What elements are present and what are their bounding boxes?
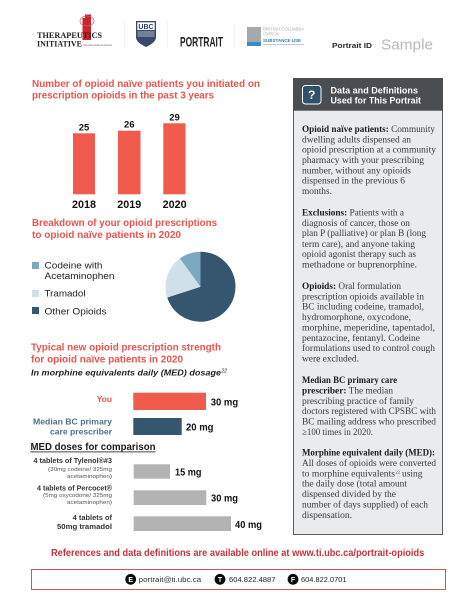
- bar: you: [97, 393, 238, 410]
- pie legend: Acetaminophen: [44, 271, 114, 281]
- definition: exclusions: plan P (palliative) or plan B (long: [302, 228, 426, 239]
- pie legend: Tramadol: [44, 288, 86, 298]
- contact box: 604.822.4887: [229, 577, 276, 584]
- definition: morphine equivalent daily: [302, 448, 436, 521]
- definition: opioids: BC including codeine, tramadol,: [302, 303, 424, 313]
- definition: opioid naive patients: months.: [302, 187, 332, 197]
- definition: morphine equivalent daily: 22: [396, 469, 400, 474]
- definition: median prescriber: ≥100 times in 2020.: [302, 428, 373, 438]
- bar: tramadol: 50mg tramadol: [57, 524, 112, 531]
- panel header: Data and Definitions: [330, 86, 418, 96]
- definition: exclusions: diagnosis of cancer, those on: [302, 218, 410, 229]
- logo: UBC shield: UBC: [138, 24, 154, 31]
- definition: morphine equivalent daily: to morphine equivalents: [302, 469, 395, 479]
- portrait id: Sample: [381, 36, 433, 54]
- pie legend: [32, 260, 114, 316]
- bar: Percocet: 30 mg: [211, 492, 238, 504]
- bar: Tylenol: 15 mg: [175, 466, 202, 478]
- icon: fax: [288, 574, 298, 585]
- bar: median prescriber: care prescriber: [50, 426, 113, 436]
- definition: opioids: formulations used to control cough: [302, 343, 435, 354]
- panel header: ?: [308, 88, 315, 102]
- definition: opioid naive patients: dwelling adults dispensed an: [302, 135, 411, 145]
- bar: you: 30 mg: [211, 396, 238, 408]
- logo: Therapeutics Initiative: THERAPEUTICS: [37, 31, 103, 40]
- definition: morphine equivalent daily: Morphine equivalent daily (MED):: [302, 448, 435, 458]
- definition: morphine equivalent daily: the daily dose (total amount: [302, 479, 407, 490]
- definition: opioid naive patients: opioid prescription at a community: [302, 146, 436, 156]
- bar: you: You: [97, 394, 112, 404]
- definition: morphine equivalent daily: using: [402, 469, 423, 479]
- contact box: portrait@ti.ubc.ca: [139, 577, 201, 584]
- logo: Therapeutics Initiative: [37, 14, 112, 48]
- icon: fax: F: [291, 577, 296, 584]
- icon: telephone: T: [218, 577, 223, 584]
- icon: email: E: [128, 577, 133, 584]
- heading: patients initiated: [32, 79, 260, 102]
- heading: prescription strength: [31, 342, 227, 378]
- bar chart: patients per year: 26: [124, 120, 135, 130]
- bar: tramadol: 4 tablets of: [73, 515, 113, 522]
- bar: Tylenol: (30mg codeine/ 325mg: [48, 467, 112, 473]
- bar: tramadol: [57, 515, 262, 531]
- heading: breakdown: [32, 218, 217, 241]
- definition: exclusions: term care), and anyone taking: [302, 239, 415, 250]
- logo: UBC shield: [136, 21, 156, 47]
- references line: References and data definitions are available online at www.ti.ubc.ca/portrait-opioids: [51, 548, 425, 559]
- definition: opioid naive patients: [302, 125, 436, 197]
- icon: email: [125, 574, 136, 585]
- definition: median prescriber: prescribing practice of family: [302, 396, 414, 407]
- heading: patients initiated: Number of opioid naïve patients you initiated on: [32, 79, 260, 90]
- pie legend: Other Opioids: [44, 306, 107, 316]
- definition: opioids: morphine, meperidine, tapentadol,: [302, 323, 435, 333]
- bar chart: patients per year: 29: [169, 112, 180, 124]
- definition: morphine equivalent daily: All doses of opioids were converted: [302, 458, 436, 469]
- bar chart: patients per year: 25: [79, 122, 90, 133]
- bar: median prescriber: [33, 416, 214, 436]
- definition: exclusions: [302, 208, 426, 270]
- heading: prescription strength: Typical new opioid prescription strength: [31, 342, 221, 354]
- bar: median prescriber: Median BC primary: [33, 416, 112, 426]
- definition: morphine equivalent daily: dispensation.: [302, 511, 352, 521]
- panel header: Used for This Portrait: [330, 96, 421, 106]
- bar: Percocet: (5mg oxycodone/ 325mg: [43, 493, 112, 499]
- definition: median prescriber: [302, 376, 436, 438]
- definition: median prescriber: Median BC primary care: [302, 376, 397, 386]
- definition: opioid naive patients: dispensed in the previous 6: [302, 177, 405, 187]
- definition: opioids: prescription opioids available in: [302, 292, 424, 302]
- heading: prescription strength: for opioid naïve patients in 2020: [31, 354, 183, 365]
- logo: Therapeutics Initiative: Independent Healthcare Evidence: [83, 43, 112, 47]
- bar: Tylenol: 4 tablets of Tylenol®#3: [34, 457, 112, 465]
- definition: median prescriber: doctors registered with CPSBC with: [302, 407, 436, 417]
- bar: Tylenol: acetaminophen): [67, 474, 112, 480]
- heading: prescription strength: In morphine equivalents daily (MED) dosage: [31, 368, 221, 378]
- definition: opioid naive patients: pharmacy with your prescribing: [302, 156, 424, 166]
- bar: tramadol: 40 mg: [235, 519, 262, 531]
- definition: morphine equivalent daily: number of days supplied) of each: [302, 499, 428, 510]
- bar: Percocet: acetaminophen): [67, 500, 112, 506]
- definition: opioids: pentazocine, fentanyl. Codeine: [302, 333, 420, 344]
- portrait id: [332, 36, 433, 54]
- logo: Portrait: PORTRAIT: [180, 34, 223, 50]
- heading: breakdown: to opioid naïve patients in 2020: [32, 230, 181, 241]
- definition: opioids: were excluded.: [302, 355, 359, 365]
- bar: median prescriber: 20 mg: [186, 422, 214, 434]
- definition: opioids: hydromorphone, oxycodone,: [302, 313, 411, 323]
- heading: patients initiated: prescription opioids in the past 3 years: [32, 90, 214, 102]
- heading: prescription strength: 22: [220, 368, 227, 374]
- heading: MED doses: MED doses for comparison: [30, 442, 156, 453]
- portrait id: Portrait ID: [332, 41, 373, 50]
- definition: opioid naive patients: Opioid naïve patients: Community: [302, 125, 435, 135]
- definition: exclusions: methadone or buprenorphine.: [302, 260, 417, 270]
- logo: BC Centre on Substance Use: [247, 26, 304, 46]
- logo: BC Centre on Substance Use: CENTRE ON: [263, 32, 279, 36]
- definition: opioids: [302, 281, 435, 365]
- contact box: 604.822.0701: [301, 577, 347, 584]
- bar chart: patients per year: 2018: [72, 199, 96, 211]
- bar chart: patients per year: [72, 112, 187, 211]
- definition: morphine equivalent daily: dispensed divided by the: [302, 490, 396, 500]
- logo: BC Centre on Substance Use: BRITISH COLUMBIA: [263, 26, 304, 32]
- bar: Tylenol: [34, 457, 202, 480]
- definition: median prescriber: BC mailing address who prescribed: [302, 418, 436, 428]
- definition: exclusions: Exclusions: Patients with a: [302, 208, 405, 218]
- pie legend: Codeine with: [44, 260, 102, 270]
- pie chart: [165, 252, 235, 322]
- bar chart: patients per year: 2020: [163, 199, 187, 211]
- panel header: [293, 78, 443, 111]
- definition: median prescriber: prescriber: The median: [302, 386, 393, 396]
- bar: Percocet: 4 tablets of Percocet®: [37, 484, 113, 492]
- heading: breakdown: Breakdown of your opioid prescriptions: [32, 218, 217, 229]
- logo: Therapeutics Initiative: INITIATIVE: [37, 40, 82, 48]
- bar: Percocet: [37, 484, 238, 506]
- logo: BC Centre on Substance Use: SUBSTANCE USE: [263, 38, 302, 44]
- definition: opioids: Opioids: Oral formulation: [302, 281, 401, 292]
- definition: opioid naive patients: number, without any opioids: [302, 166, 411, 176]
- definition: exclusions: opioid agonist therapy such as: [302, 250, 416, 260]
- contact box: [31, 569, 446, 590]
- bar chart: patients per year: 2019: [117, 199, 141, 211]
- icon: telephone: [215, 574, 225, 585]
- panel: data and definitions: [293, 78, 443, 534]
